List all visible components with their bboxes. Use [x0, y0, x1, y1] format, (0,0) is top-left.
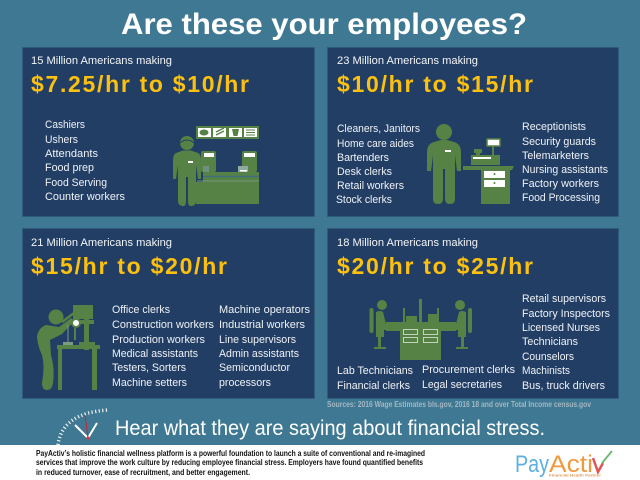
job list: right: Industrial workers: [219, 319, 305, 331]
job list: bottom: Procurement clerks: [422, 364, 515, 376]
job list: Attendants: [45, 148, 99, 160]
job list: bottom: Lab Technicians: [337, 365, 413, 377]
logo: PayActiv: [515, 451, 612, 478]
logo: PayActiv: Acti: [549, 451, 593, 478]
panel: $7.25 to $10: [22, 48, 314, 216]
panel: $20 to $25: [328, 228, 618, 398]
job list: right: Factory Inspectors: [522, 308, 610, 320]
job list: bottom: Financial clerks: [337, 380, 410, 392]
job list: right: Semiconductor: [219, 362, 290, 374]
job list: left: Home care aides: [337, 138, 414, 150]
job list: right: Machinists: [522, 365, 570, 377]
job list: Food Serving: [45, 177, 107, 189]
footer description: services that improve the work culture by reducing employee financial stress. Employers have found quantified benefits: [36, 458, 423, 467]
job list: right: Security guards: [522, 136, 596, 148]
job list: left: [112, 304, 214, 389]
logo: PayActiv: Pay: [515, 451, 549, 478]
footer description: in reduced turnover, ease of recruitment, and better engagement.: [36, 468, 250, 477]
job list: left: Cleaners, Janitors: [337, 123, 420, 135]
sources note: Sources: 2016 Wage Estimates bls.gov, 2016 18 and over Total Income census.gov: [327, 400, 591, 409]
job list: right: Technicians: [522, 336, 578, 348]
job list: left: [336, 123, 420, 206]
wage range: $20 to $25: $20/hr to $25/hr: [337, 253, 533, 279]
job list: right: [522, 293, 610, 392]
job list: right: Line supervisors: [219, 334, 296, 346]
job list: right: Receptionists: [522, 121, 586, 133]
wage range: $10 to $15: $10/hr to $15/hr: [337, 71, 533, 97]
footer description: PayActiv’s holistic financial wellness platform is a powerful foundation to launch a suite of conventional and re-imagined: [36, 449, 425, 458]
panel heading: 18 million: 18 Million Americans making: [337, 237, 478, 249]
icon: two office workers at shared desk: [370, 299, 472, 360]
job list: Ushers: [45, 134, 78, 146]
logo: PayActiv: Financial Health Partner: [549, 472, 601, 478]
job list: Food prep: [45, 162, 94, 174]
job list: right: Bus, truck drivers: [522, 380, 605, 392]
job list: left: Bartenders: [337, 152, 389, 164]
job list: right: Factory workers: [522, 178, 599, 190]
job list: right: Nursing assistants: [522, 164, 608, 176]
job list: [45, 119, 125, 203]
job list: left: Machine setters: [112, 377, 187, 389]
icon: machine operator at drill press: [37, 305, 100, 390]
footer description: [36, 449, 425, 477]
job list: right: Telemarketers: [522, 150, 589, 162]
panel: $15 to $20: [22, 228, 314, 398]
job list: right: Machine operators: [219, 304, 310, 316]
panel: $10 to $15: [328, 48, 618, 216]
icon: cashier at food counter: [173, 126, 259, 206]
job list: right: [522, 121, 608, 204]
job list: left: Construction workers: [112, 319, 214, 331]
job list: left: Desk clerks: [337, 166, 392, 178]
job list: left: Medical assistants: [112, 348, 198, 360]
job list: right: Licensed Nurses: [522, 322, 600, 334]
job list: left: Office clerks: [112, 304, 170, 316]
footer band: [0, 445, 640, 480]
title: Are these your employees?: [121, 8, 527, 41]
icon: clock gauge: [58, 410, 108, 445]
job list: right: Retail supervisors: [522, 293, 606, 305]
panel heading: 21 million: 21 Million Americans making: [31, 237, 172, 249]
icon: retail clerk at register: [427, 124, 514, 204]
wage range: $7.25 to $10: $7.25/hr to $10/hr: [31, 71, 249, 97]
job list: left: Retail workers: [337, 180, 404, 192]
panel heading: 15 million: 15 Million Americans making: [31, 55, 172, 67]
job list: right: [219, 304, 310, 389]
wage range: $15 to $20: $15/hr to $20/hr: [31, 253, 227, 279]
job list: left: Stock clerks: [336, 194, 392, 206]
job list: right: Admin assistants: [219, 348, 299, 360]
job list: left: Testers, Sorters: [112, 362, 186, 374]
job list: bottom: [337, 364, 515, 392]
job list: right: Food Processing: [522, 192, 600, 204]
job list: Cashiers: [45, 119, 85, 131]
job list: left: Production workers: [112, 334, 205, 346]
job list: right: Counselors: [522, 351, 574, 363]
panel heading: 23 million: 23 Million Americans making: [337, 55, 478, 67]
job list: bottom: Legal secretaries: [422, 379, 502, 391]
job list: right: processors: [219, 377, 271, 389]
tagline: Hear what they are saying about financial stress.: [115, 417, 545, 440]
job list: Counter workers: [45, 191, 125, 203]
